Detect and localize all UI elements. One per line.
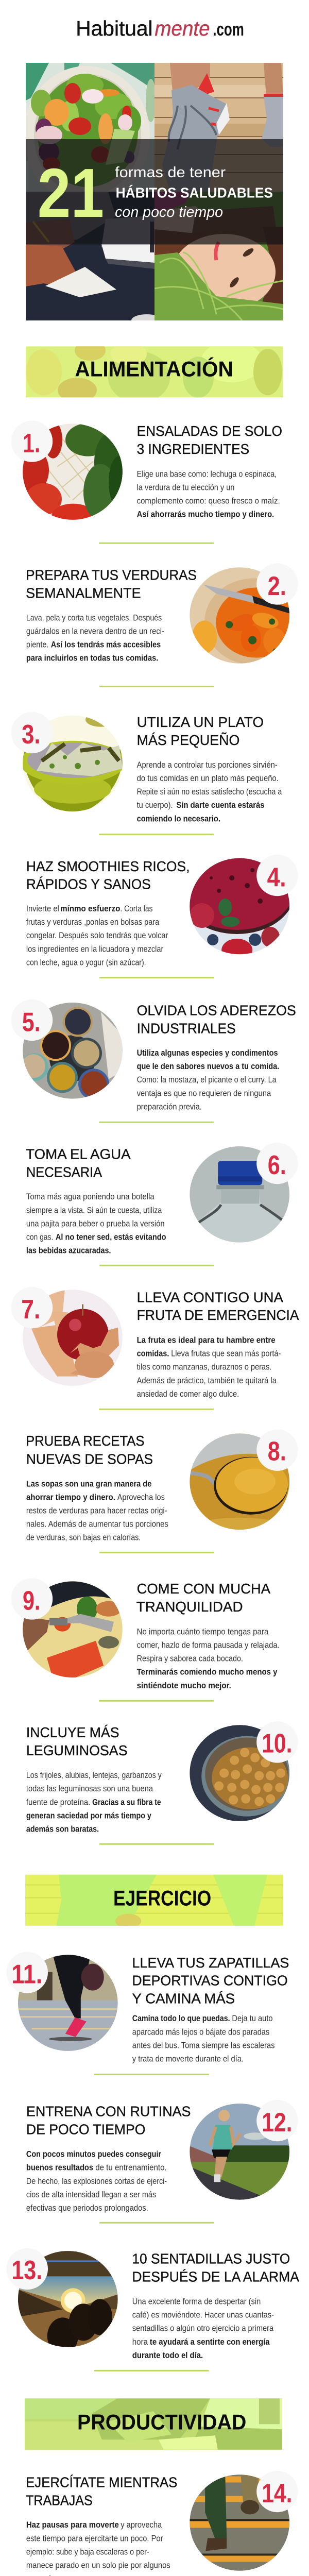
text block: Toma más agua poniendo una botella (26, 1192, 154, 1201)
text block: la verdura de tu elección y un (137, 482, 234, 492)
text block: complemento como: queso fresco o maíz. (137, 496, 280, 506)
text block: Las sopas son una gran manera de (26, 1479, 151, 1488)
text block: mínmo esfuerzo (60, 904, 120, 913)
number 21: 21 (38, 154, 104, 232)
text block (137, 760, 282, 823)
text block: fuente de proteína. (26, 1797, 90, 1807)
item 11 (7, 1952, 289, 2064)
number badge (256, 2471, 298, 2512)
text block: Una excelente forma de despertar (sin (132, 2297, 261, 2306)
text block: los ingredientes en la licuadora y mezclar (26, 944, 164, 954)
text block (132, 2013, 275, 2064)
heading (26, 2474, 177, 2508)
heading: FRUTA DE EMERGENCIA (137, 1307, 299, 1323)
number badge: 10. (262, 1729, 293, 1759)
number badge (256, 1143, 298, 1184)
heading: EJERCÍTATE MIENTRAS (26, 2474, 177, 2490)
text block: Sin darte cuenta estarás (176, 800, 265, 810)
photo: berry smoothie (190, 858, 289, 954)
photo: sunrise over feet (18, 2251, 118, 2347)
text block: do tus comidas en un plato más pequeño. (137, 773, 279, 783)
number badge (7, 2248, 48, 2290)
number badge (11, 420, 53, 462)
text block: No importa cuánto tiempo tengas para (137, 1626, 269, 1636)
item 7 (11, 1287, 299, 1399)
heading (137, 1003, 296, 1037)
text block: ansiedad de comer algo dulce. (137, 1389, 239, 1399)
hero photo: running shoes (154, 63, 283, 192)
heading (132, 2250, 299, 2285)
section banner: productividad: PRODUCTIVIDAD (77, 2410, 246, 2434)
text block (26, 1192, 166, 1256)
heading (137, 1289, 299, 1323)
item 10 (26, 1721, 298, 1834)
heading: NUEVAS DE SOPAS (26, 1451, 153, 1467)
number badge (7, 1952, 48, 1993)
number badge: 9. (23, 1586, 40, 1616)
text block: Lleva frutas que sean más portá- (171, 1349, 281, 1359)
text block: La fruta es ideal para tu hambre entre (137, 1335, 276, 1345)
text block: este tiempo para ejercitarte un poco. Por (26, 2533, 163, 2543)
text block: de verduras, son bajas en calorías. (26, 1533, 141, 1543)
heading: ENSALADAS DE SOLO (137, 423, 282, 439)
heading: RÁPIDOS Y SANOS (26, 876, 151, 892)
item 9 (11, 1578, 280, 1690)
text block (26, 1770, 162, 1834)
header logo: Habitual (76, 16, 153, 40)
text block: . Corta las (120, 904, 152, 913)
heading: TOMA EL AGUA (26, 1146, 131, 1162)
heading: DESPUÉS DE LA ALARMA (132, 2269, 299, 2285)
heading: LEGUMINOSAS (26, 1742, 128, 1758)
heading: ENTRENA CON RUTINAS (26, 2103, 191, 2120)
text block: Repite si aún no estas satisfecho (escucha a (137, 787, 282, 796)
number badge: 5. (22, 1008, 40, 1038)
text block: café) es moviéndote. Hacer unas cuantas- (132, 2310, 274, 2320)
text block: De hecho, las explosiones cortas de ejerci- (26, 2176, 167, 2186)
text block: y trata de moverte durante el día. (132, 2054, 244, 2064)
text block: Camina todo lo que puedas. (132, 2013, 230, 2023)
item 4 (26, 858, 289, 967)
photo: chickpeas (188, 1724, 292, 1823)
text block: Lava, pela y corta tus vegetales. Después (26, 613, 162, 622)
number badge (11, 999, 53, 1041)
text block: una pajita para beber o prueba la versión (26, 1218, 165, 1228)
text block: para incluirlos en todas tus comidas. (26, 653, 158, 663)
text block: todas las leguminosas son una buena (26, 1784, 153, 1793)
heading: OLVIDA LOS ADEREZOS (137, 1003, 296, 1019)
text block: piente. (26, 640, 48, 650)
text block: Gracias a su fibra te (92, 1797, 161, 1807)
text block: Como: la mostaza, el picante o el curry. La (137, 1075, 277, 1084)
section banner: productividad (25, 2398, 282, 2450)
text block: que le den sabores nuevos a tu comida. (137, 1061, 279, 1071)
text block: Invierte el (26, 904, 59, 913)
text block (137, 1335, 281, 1399)
number badge: 13. (11, 2256, 42, 2285)
text block: tiles como manzanas, duraznos o peras. (137, 1362, 271, 1372)
text block (137, 469, 280, 519)
text block: Al no tener sed, estás evitando (56, 1232, 166, 1242)
text block: además son baratas. (26, 1824, 99, 1834)
number badge (11, 712, 53, 753)
text block: de tu entrenamiento. (95, 2163, 167, 2173)
number badge: 12. (262, 2108, 293, 2138)
text block: Con pocos minutos puedes conseguir (26, 2149, 161, 2159)
header logo: mente (154, 16, 210, 40)
text block: Utiliza algunas especies y condimentos (137, 1048, 278, 1058)
text block: durante todo el día. (132, 2350, 203, 2360)
number badge: 4. (267, 862, 286, 892)
text block: ahorrar tiempo y dinero. (26, 1492, 115, 1502)
photo: peppers (190, 567, 289, 664)
dark band (26, 139, 283, 244)
heading: 10 SENTADILLAS JUSTO (132, 2250, 290, 2266)
heading: COME CON MUCHA (137, 1581, 271, 1597)
text block (137, 1048, 279, 1111)
photo: spice bowls (21, 1001, 124, 1100)
text block: Así ahorrarás mucho tiempo y dinero. (137, 510, 274, 519)
photo: water bottle (188, 1145, 291, 1244)
item 12 (26, 2100, 298, 2213)
text block: las bebidas azucaradas. (26, 1246, 111, 1256)
item 2 (26, 567, 289, 664)
hero title: HÁBITOS SALUDABLES (116, 184, 273, 201)
item 3 (11, 712, 282, 823)
item 13 (7, 2248, 299, 2360)
number badge (11, 1578, 53, 1620)
heading: INDUSTRIALES (137, 1020, 236, 1037)
heading: LLEVA CONTIGO UNA (137, 1289, 283, 1305)
text block: nales. Además de aumentar tus porciones (26, 1519, 168, 1529)
number badge (11, 1287, 53, 1328)
text block: frutas y verduras ,ponlas en bolsas para (26, 917, 160, 927)
text block: efectivas que periodos prolongados. (26, 2203, 148, 2213)
text block: con gas. (26, 1232, 53, 1242)
number badge (256, 1429, 298, 1471)
text block: Aprovecha los (117, 1492, 165, 1502)
photo: apple in hand (21, 1289, 124, 1387)
heading: HAZ SMOOTHIES RICOS, (26, 858, 190, 874)
text block: Elige una base como: lechuga o espinaca, (137, 469, 277, 479)
number badge (256, 855, 298, 896)
item 8 (26, 1429, 298, 1543)
heading (26, 1146, 131, 1180)
header logo: .com (213, 19, 244, 40)
text block: tu cuerpo). (137, 800, 173, 810)
hero photo: salad (26, 63, 154, 192)
text block: restos de verduras para hacer rectas origi- (26, 1505, 167, 1516)
text block: Los frijoles, alubias, lentejas, garbanzos y (26, 1770, 162, 1780)
number badge: 1. (23, 429, 40, 459)
text block: comidas. (137, 1349, 169, 1359)
header logo (76, 16, 244, 40)
photo: tomato and cheese (23, 423, 123, 520)
heading (26, 858, 190, 892)
text block: buenos resultados (26, 2163, 93, 2173)
heading: LLEVA TUS ZAPATILLAS (132, 1955, 289, 1971)
text block: sentadillas o algún otro ejercicio a primera (132, 2324, 274, 2333)
heading: NECESARIA (26, 1164, 102, 1180)
photo: walking person (16, 1954, 119, 2053)
text block: ejemplo: sube y baja escaleras o per- (26, 2547, 149, 2556)
text block: guárdalos en la nevera dentro de un reci- (26, 626, 164, 636)
number badge: 2. (268, 571, 286, 601)
heading: SEMANALMENTE (26, 585, 141, 601)
text block: hora (132, 2337, 148, 2347)
text block: comer, hazlo de forma pausada y relajada. (137, 1640, 280, 1650)
heading (26, 567, 197, 601)
heading: PRUEBA RECETAS (26, 1433, 144, 1449)
text block: Haz pausas para moverte (26, 2520, 119, 2530)
number badge: 6. (268, 1150, 286, 1180)
text block: te ayudará a sentirte con energía (150, 2337, 270, 2347)
text block: Deja tu auto (232, 2013, 273, 2023)
heading: UTILIZA UN PLATO (137, 714, 264, 730)
text block (132, 2297, 274, 2360)
text block: aparcado más lejos o bájate dos paradas (132, 2027, 269, 2037)
photo: runner (188, 2102, 291, 2201)
heading: DEPORTIVAS CONTIGO (132, 1973, 288, 1989)
heading: TRANQUILIDAD (136, 1599, 243, 1615)
section banner: alimentación (26, 340, 283, 403)
hero title: con poco tiempo (115, 204, 223, 221)
heading (26, 2103, 191, 2137)
heading: Y CAMINA MÁS (132, 1990, 235, 2006)
heading: DE POCO TIEMPO (26, 2121, 145, 2137)
number badge: 8. (268, 1437, 286, 1467)
text block: Terminarás comiendo mucho menos y (137, 1667, 278, 1677)
section banner: ejercicio: EJERCICIO (113, 1886, 211, 1910)
number badge: 11. (11, 1959, 42, 1989)
number badge (256, 2100, 298, 2141)
heading (137, 423, 282, 457)
number badge: 14. (262, 2479, 293, 2509)
text block: congelar. Después solo tendrás que volcar (26, 930, 168, 940)
text block (26, 613, 164, 663)
photo: stairs (188, 2473, 291, 2572)
text block: y aprovecha (121, 2520, 162, 2530)
text block (137, 1626, 280, 1690)
heading: INCLUYE MÁS (26, 1724, 119, 1740)
hero photo: writing hand (26, 192, 154, 320)
number badge (256, 563, 298, 605)
item 14 (26, 2471, 298, 2576)
text block (26, 1479, 168, 1543)
text block: sintiéndote mucho mejor. (137, 1681, 231, 1690)
hero title: formas de tener (115, 164, 226, 181)
text block: con leche, agua o yogur (sin azúcar). (26, 957, 146, 967)
hero photo: woman in grass (154, 192, 283, 320)
text block (26, 2520, 170, 2576)
text block: preparación previa. (137, 1101, 202, 1111)
text block: manece parado en un solo pie por algunos (26, 2561, 170, 2570)
text block: Respira y saborea cada bocado. (137, 1654, 243, 1664)
text block: Así los tendrás más accesibles (51, 640, 161, 650)
text block: siempre a la vista. Si aún te cuesta, utiliza (26, 1205, 162, 1215)
photo: green bowl (20, 713, 125, 813)
item 1 (23, 423, 282, 520)
text block: Además de práctico, también te quitará la (137, 1376, 277, 1385)
heading: 3 INGREDIENTES (137, 441, 249, 457)
text block: Aprende a controlar tus porciones sirvién- (137, 760, 278, 770)
heading (132, 1955, 289, 2006)
section banner: alimentación: ALIMENTACIÓN (75, 357, 233, 381)
heading (26, 1724, 128, 1758)
text block: comiendo lo necesario. (137, 814, 220, 823)
number badge: 3. (22, 720, 40, 750)
text block: antes del bus. Toma siempre las escaleras (132, 2040, 275, 2050)
text block (26, 904, 168, 967)
heading: PREPARA TUS VERDURAS (26, 567, 197, 583)
item 5 (11, 999, 296, 1111)
heading: TRABAJAS (26, 2492, 93, 2508)
item 6 (26, 1143, 298, 1256)
photo: soup spoon (188, 1432, 291, 1533)
photo: pasta and fork (21, 1580, 124, 1679)
hero title (115, 164, 273, 221)
text block (26, 2149, 167, 2213)
heading (137, 714, 264, 748)
text block: ventaja es que no requieren de ninguna (137, 1088, 271, 1098)
number badge (256, 1721, 298, 1763)
text block: cios de alta intensidad llegan a ser más (26, 2190, 156, 2199)
heading (136, 1581, 271, 1615)
number badge: 7. (21, 1295, 40, 1325)
text block: generan saciedad por más tiempo y (26, 1810, 151, 1820)
heading (26, 1433, 153, 1467)
section banner: ejercicio (25, 1875, 283, 1928)
hero panel (23, 63, 283, 327)
heading: MÁS PEQUEÑO (137, 732, 239, 748)
